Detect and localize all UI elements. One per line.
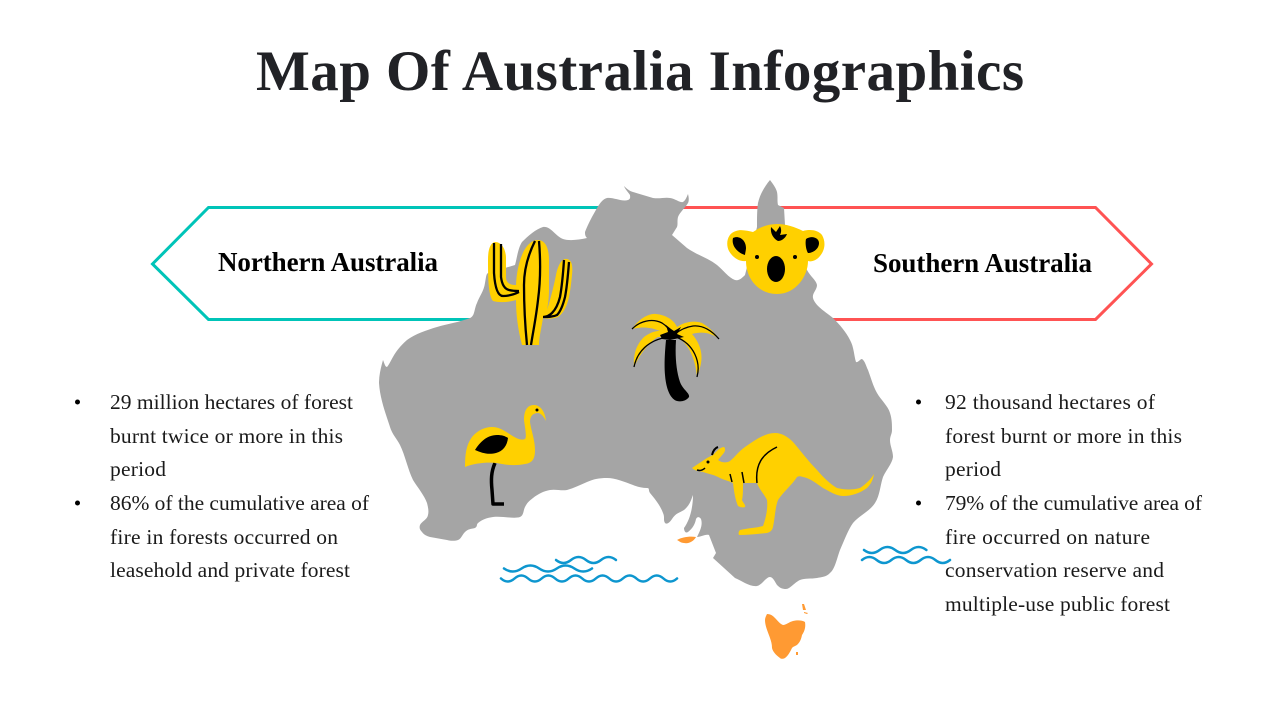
icon: palm tree xyxy=(632,314,719,401)
map of australia xyxy=(379,180,893,659)
waves: east of map xyxy=(862,547,950,563)
tasmania xyxy=(765,604,808,659)
icon: koala xyxy=(727,224,824,294)
title: Map Of Australia Infographics xyxy=(256,40,1024,103)
text block: northern australia bullets: 29 million hectares of forest xyxy=(110,390,353,414)
text block: northern australia bullets xyxy=(75,390,370,582)
text block: southern australia bullets: forest burnt or more in this xyxy=(945,424,1182,448)
text block: southern australia bullets: conservation reserve and xyxy=(945,558,1164,582)
text block: northern australia bullets: period xyxy=(110,457,166,481)
mainland xyxy=(379,180,893,589)
waves: south of map xyxy=(501,557,677,582)
text block: southern australia bullets: 79% of the cumulative area of xyxy=(945,491,1203,515)
text block: northern australia bullets: leasehold and private forest xyxy=(110,558,350,582)
text block: northern australia bullets: fire in forests occurred on xyxy=(110,525,338,549)
south australia gulf islet xyxy=(677,537,696,543)
text block: northern australia bullets: burnt twice or more in this xyxy=(110,424,343,448)
icon: kangaroo xyxy=(692,433,874,535)
text block: southern australia bullets: 92 thousand hectares of xyxy=(945,390,1156,414)
text block: southern australia bullets: fire occurred on nature xyxy=(945,525,1150,549)
text block: southern australia bullets: multiple-use public forest xyxy=(945,592,1170,616)
text block: northern australia bullets: 86% of the cumulative area of xyxy=(110,491,370,515)
text block: southern australia bullets: period xyxy=(945,457,1001,481)
text block: southern australia bullets xyxy=(916,390,1203,616)
icon: cactus xyxy=(488,240,572,345)
panel: southern australia arrow xyxy=(640,208,1152,320)
heading: northern australia: Northern Australia xyxy=(218,247,438,277)
panel: northern australia arrow xyxy=(152,208,640,320)
heading: southern australia: Southern Australia xyxy=(873,248,1092,278)
icon: flamingo xyxy=(465,405,546,504)
